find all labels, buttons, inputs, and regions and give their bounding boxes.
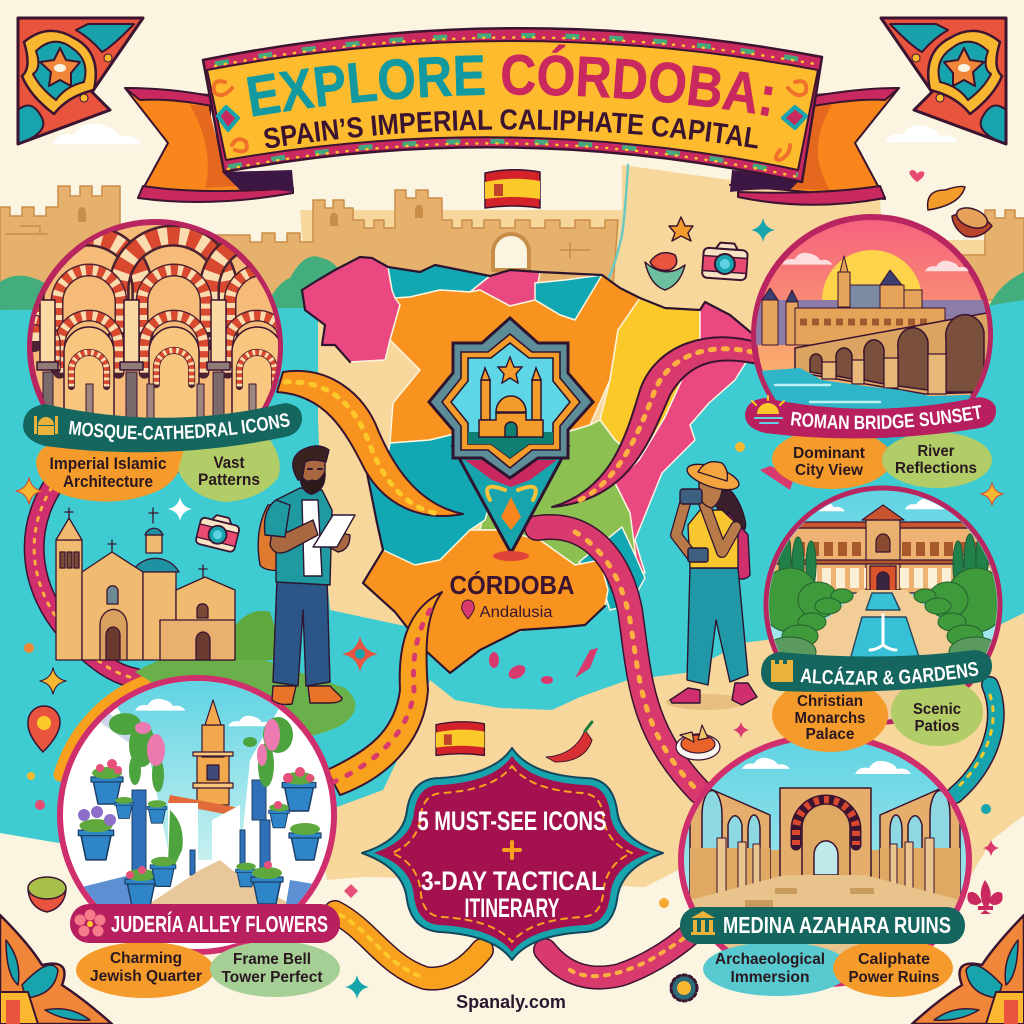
icon: empanada (928, 186, 965, 210)
bridge body (795, 312, 992, 394)
chip: Dominant City View: City View (795, 462, 864, 479)
blue doors and shutters (132, 780, 270, 890)
lower openings (64, 327, 282, 420)
banner top scallops (215, 35, 815, 64)
camera held (680, 489, 702, 504)
chip: Vast Patterns (178, 440, 280, 502)
chip: Frame Bell Tower Perfect: Frame Bell (233, 951, 311, 968)
traveler woman with camera (666, 459, 757, 710)
icon: food bowl (952, 204, 992, 237)
alley houses (168, 803, 240, 900)
flag bottom (436, 722, 484, 755)
chip: Imperial Islamic Architecture (36, 442, 184, 502)
sea (0, 300, 1024, 860)
horseshoe arch (796, 800, 856, 845)
region: Andalusia (363, 530, 608, 673)
photo circle: mosque-cathedral (27, 219, 283, 473)
right arcade wall (880, 780, 960, 905)
hair (715, 480, 746, 531)
icon: tapas plate (676, 725, 720, 760)
clouds (782, 253, 970, 271)
right arch openings (890, 791, 950, 880)
shirt sleeve (264, 500, 290, 537)
icon: camera left (195, 512, 241, 553)
right hand arm (325, 530, 350, 552)
middle fill (261, 285, 277, 329)
flower blooms (96, 759, 314, 879)
region: Asturias (388, 265, 490, 298)
hill behind cathedral (225, 611, 285, 660)
label: Andalusia with pin (462, 600, 553, 621)
palace lower arcade (815, 568, 990, 588)
ground (666, 694, 746, 710)
palace upper arcade (782, 542, 988, 556)
left arcade wall (690, 780, 770, 905)
pin magenta top (465, 460, 557, 487)
flower pots (78, 767, 321, 906)
chip: Vast Patterns: Vast (214, 454, 245, 472)
banner right tail (730, 88, 899, 205)
ruin floor (690, 875, 960, 990)
chip: Archaeological Immersion (703, 942, 851, 996)
map of Spain (302, 257, 760, 673)
icon: orange star (669, 217, 693, 241)
cobbled alley (140, 860, 300, 910)
photo circle: alcazar (760, 488, 1006, 722)
arcade columns (717, 838, 934, 900)
banner and chips: alcazar (761, 650, 992, 752)
skyline arcade (800, 318, 930, 326)
flower mini icon (74, 910, 106, 936)
pillars (40, 300, 226, 365)
teal dot right (981, 804, 991, 814)
yellow dot (735, 442, 745, 452)
chip: Charming Jewish Quarter: Charming (110, 950, 182, 967)
central pin emblem (429, 318, 593, 553)
second row arches (57, 270, 294, 332)
icon: tapas bowl (645, 253, 685, 290)
chip: Christian Monarchs Palace (772, 678, 888, 752)
photo circle: roman bridge (745, 217, 1000, 460)
water shine (774, 384, 882, 404)
ribbon: plaque to Medina (545, 925, 700, 978)
bridge arches (810, 315, 984, 392)
purple blooms (78, 806, 116, 826)
central gate (780, 788, 871, 878)
cathedral (56, 508, 285, 660)
icon: fleur de lis (967, 880, 1003, 914)
region: Galicia (302, 257, 400, 362)
neck and face (300, 457, 325, 494)
icon: chili (546, 722, 592, 762)
corner ornament top right (881, 18, 1006, 144)
portal (100, 586, 210, 660)
banner pill (23, 403, 302, 452)
sparkle teal bottom (345, 975, 369, 999)
map outline (302, 257, 760, 673)
banner and chips: medina azahara (680, 907, 965, 997)
banner left tail (125, 88, 294, 202)
temple mini icon (691, 911, 715, 935)
fountain spray (870, 615, 896, 650)
cypress trees (778, 534, 988, 582)
icon: compass star (342, 636, 378, 672)
icon: camera top (702, 242, 748, 280)
plaque outer shape (362, 748, 663, 960)
footer site name: Spanaly.com (456, 992, 566, 1012)
right arm (704, 503, 736, 552)
chip: Imperial Islamic Architecture: Architecture (63, 473, 153, 491)
ribbon: Juderia to plaque (335, 912, 482, 979)
beard (300, 472, 325, 494)
castle mini icon (771, 660, 793, 682)
jeans (273, 578, 330, 686)
region: Extremadura (367, 430, 500, 565)
heading: MEDINA AZAHARA RUINS (723, 912, 951, 938)
title line one: EXPLORE CÓRDOBA: (246, 44, 773, 117)
corner ornament bottom left (0, 915, 112, 1024)
white tee (302, 500, 322, 576)
sun (822, 250, 921, 300)
capitals (37, 362, 230, 370)
icon: orange dot (24, 643, 34, 653)
region: Aragon yellow (600, 298, 700, 460)
background clouds (52, 123, 958, 144)
chip: Scenic Patios (891, 678, 983, 746)
hanging vines right (243, 717, 293, 787)
region: Catalonia Valencia pink (615, 302, 760, 573)
star right (981, 483, 1003, 505)
label: Andalusia with pin: Andalusia (480, 604, 553, 621)
heading: ALCÁZAR & GARDENS (800, 662, 978, 685)
fountain pools (850, 593, 920, 660)
shoes (670, 683, 757, 705)
far hills (750, 300, 1000, 345)
ribbon: Córdoba to Juderia (327, 592, 442, 795)
traveler man with notepad (258, 446, 355, 704)
mosque mini icon (34, 416, 58, 435)
banner border band (203, 28, 822, 182)
plaque inner shape (374, 756, 650, 952)
middle arches (4, 316, 286, 373)
center plaque (362, 748, 663, 960)
sparkle crimson right (983, 840, 999, 856)
plus sign (504, 842, 520, 858)
heading: JUDERÍA ALLEY FLOWERS (111, 910, 328, 937)
wall backdrop (690, 850, 960, 900)
heading: MOSQUE-CATHEDRAL ICONS (69, 413, 290, 442)
face (699, 478, 722, 508)
icon: flower medallion (671, 975, 697, 1001)
dots left (27, 772, 45, 810)
banner lower dots (228, 143, 798, 177)
star band (429, 318, 593, 478)
ribbon: left loop (34, 470, 135, 678)
ribbon: right teal (955, 685, 996, 795)
corner ornament bottom right (912, 915, 1024, 1024)
islands (489, 466, 795, 684)
title banner (124, 27, 900, 206)
icon: map pin (28, 706, 60, 752)
upper inner (108, 276, 277, 334)
ribbon: mosque to map (277, 371, 463, 516)
ribbon: orange arc around Juderia (60, 680, 150, 775)
backpack (258, 505, 288, 570)
clouds (135, 699, 273, 726)
inner ground (468, 432, 553, 458)
icon: star lower left (40, 668, 66, 694)
left arch openings (701, 790, 761, 848)
left arm (676, 500, 692, 556)
garden paving (813, 590, 965, 719)
bell tower (193, 700, 233, 805)
chip: Charming Jewish Quarter (76, 942, 214, 998)
chip: Caliphate Power Ruins: Power Ruins (848, 969, 940, 986)
chip: Dominant City View (772, 429, 892, 489)
notepad (313, 515, 355, 547)
star inner sky (451, 343, 570, 458)
chip: Dominant City View: Dominant (793, 445, 866, 462)
orange dot bottom (659, 898, 669, 908)
hanging vines left (109, 713, 165, 792)
chip: Frame Bell Tower Perfect: Tower Perfect (222, 969, 323, 986)
hair (293, 446, 329, 480)
ribbon: bridge to map (552, 337, 765, 507)
photo circle: medina azahara (681, 736, 969, 990)
right hedges (914, 568, 997, 654)
city wall (0, 186, 1024, 300)
chip: Vast Patterns: Patterns (198, 471, 260, 489)
columns (42, 372, 256, 418)
banner lower scallops (228, 141, 798, 175)
jeans (687, 568, 748, 685)
region: central orange (390, 275, 640, 450)
banner pill (70, 904, 340, 943)
plaque text line two: 3-DAY TACTICAL (421, 866, 605, 896)
chip: River Reflections: River (918, 443, 954, 460)
ribbon: map down to Medina (537, 527, 700, 792)
banner and chips: mosque (23, 403, 302, 502)
chip: Archaeological Immersion: Immersion (730, 969, 810, 986)
icon: heart (909, 170, 924, 182)
label: Córdoba: CÓRDOBA (450, 570, 575, 600)
red city marker (493, 551, 529, 561)
chip: Christian Monarchs Palace: Monarchs (794, 710, 866, 727)
dome (132, 508, 179, 572)
chip: Scenic Patios: Scenic (913, 701, 961, 718)
banner pill (761, 650, 992, 692)
region: Cantabria (470, 270, 540, 306)
banner left scroll (214, 81, 247, 151)
inner gate (802, 804, 850, 878)
yellow shirt (688, 510, 738, 568)
sparkle diamond (344, 884, 358, 898)
plaque text line one: 5 MUST-SEE ICONS (418, 806, 606, 836)
chip: River Reflections: Reflections (895, 460, 977, 477)
forearm (270, 520, 318, 553)
low distant walls (690, 848, 960, 900)
small lower arches (71, 350, 275, 386)
clouds (818, 498, 945, 512)
small sparkle crimson (733, 722, 749, 738)
clouds (742, 758, 911, 774)
river line (608, 165, 628, 280)
plaque dashed line (392, 766, 632, 942)
palace (768, 505, 998, 593)
chip: Caliphate Power Ruins (833, 939, 953, 997)
banner top dots (215, 37, 815, 66)
star orange band (442, 334, 580, 468)
region: La Mancha green (480, 420, 639, 565)
chip: River Reflections (882, 432, 992, 488)
chip: Charming Jewish Quarter: Jewish Quarter (90, 968, 202, 985)
blue bases (70, 875, 350, 910)
shoes (272, 686, 342, 704)
region: Murcia (579, 527, 645, 610)
bell tower (56, 508, 82, 660)
photo circle: juderia (60, 678, 350, 952)
plaque text line three: ITINERARY (464, 893, 560, 923)
flag top (485, 170, 540, 208)
chip: Scenic Patios: Patios (914, 718, 960, 735)
orange roofs (168, 795, 240, 816)
eyes (308, 468, 322, 470)
sky (100, 680, 295, 860)
title line two: SPAIN’S IMPERIAL CALIPHATE CAPITAL (264, 109, 758, 149)
icon: teal sparkle (751, 218, 775, 242)
sun mini icon (752, 396, 784, 423)
banner pill (680, 907, 965, 944)
region: Basque (535, 275, 602, 320)
alley vine (168, 810, 183, 865)
banner and chips: roman bridge (745, 395, 996, 489)
chip: Archaeological Immersion: Archaeological (715, 951, 825, 968)
river water (762, 368, 972, 448)
corner ornament top left (18, 18, 143, 144)
green hills (0, 256, 1024, 360)
top arches (32, 224, 238, 352)
pin lower (453, 447, 568, 553)
banner yellow panel (207, 41, 818, 170)
man's ground and hill (135, 650, 355, 738)
hat (684, 459, 742, 495)
floor stones (745, 888, 874, 908)
chip: Caliphate Power Ruins: Caliphate (858, 951, 930, 968)
chip: Christian Monarchs Palace: Christian (797, 693, 863, 710)
mosque icon (479, 368, 543, 437)
heading: ROMAN BRIDGE SUNSET (790, 405, 982, 430)
pin swirls (487, 487, 536, 500)
icon: bowl left (28, 877, 66, 912)
star icon (498, 357, 522, 383)
backpack (728, 512, 750, 579)
mosque-cathedral skyline (762, 256, 945, 345)
chip: Christian Monarchs Palace: Palace (806, 726, 855, 743)
striped arch (796, 800, 856, 845)
neck camera (688, 548, 708, 562)
icon: star left (16, 478, 42, 504)
roof left (100, 712, 136, 745)
main church (82, 540, 235, 660)
chip: Imperial Islamic Architecture: Imperial Islamic (50, 455, 166, 473)
banner right scroll (776, 81, 806, 160)
banner and chips: juderia (70, 904, 340, 998)
bridge piers (822, 354, 946, 394)
teal shirt (276, 488, 332, 585)
sand land (300, 165, 1024, 887)
chip: Frame Bell Tower Perfect (210, 941, 340, 997)
banner pill (745, 397, 996, 438)
left hedges (769, 568, 854, 655)
pin diamond (501, 497, 521, 530)
icon: white sparkle (168, 497, 192, 521)
